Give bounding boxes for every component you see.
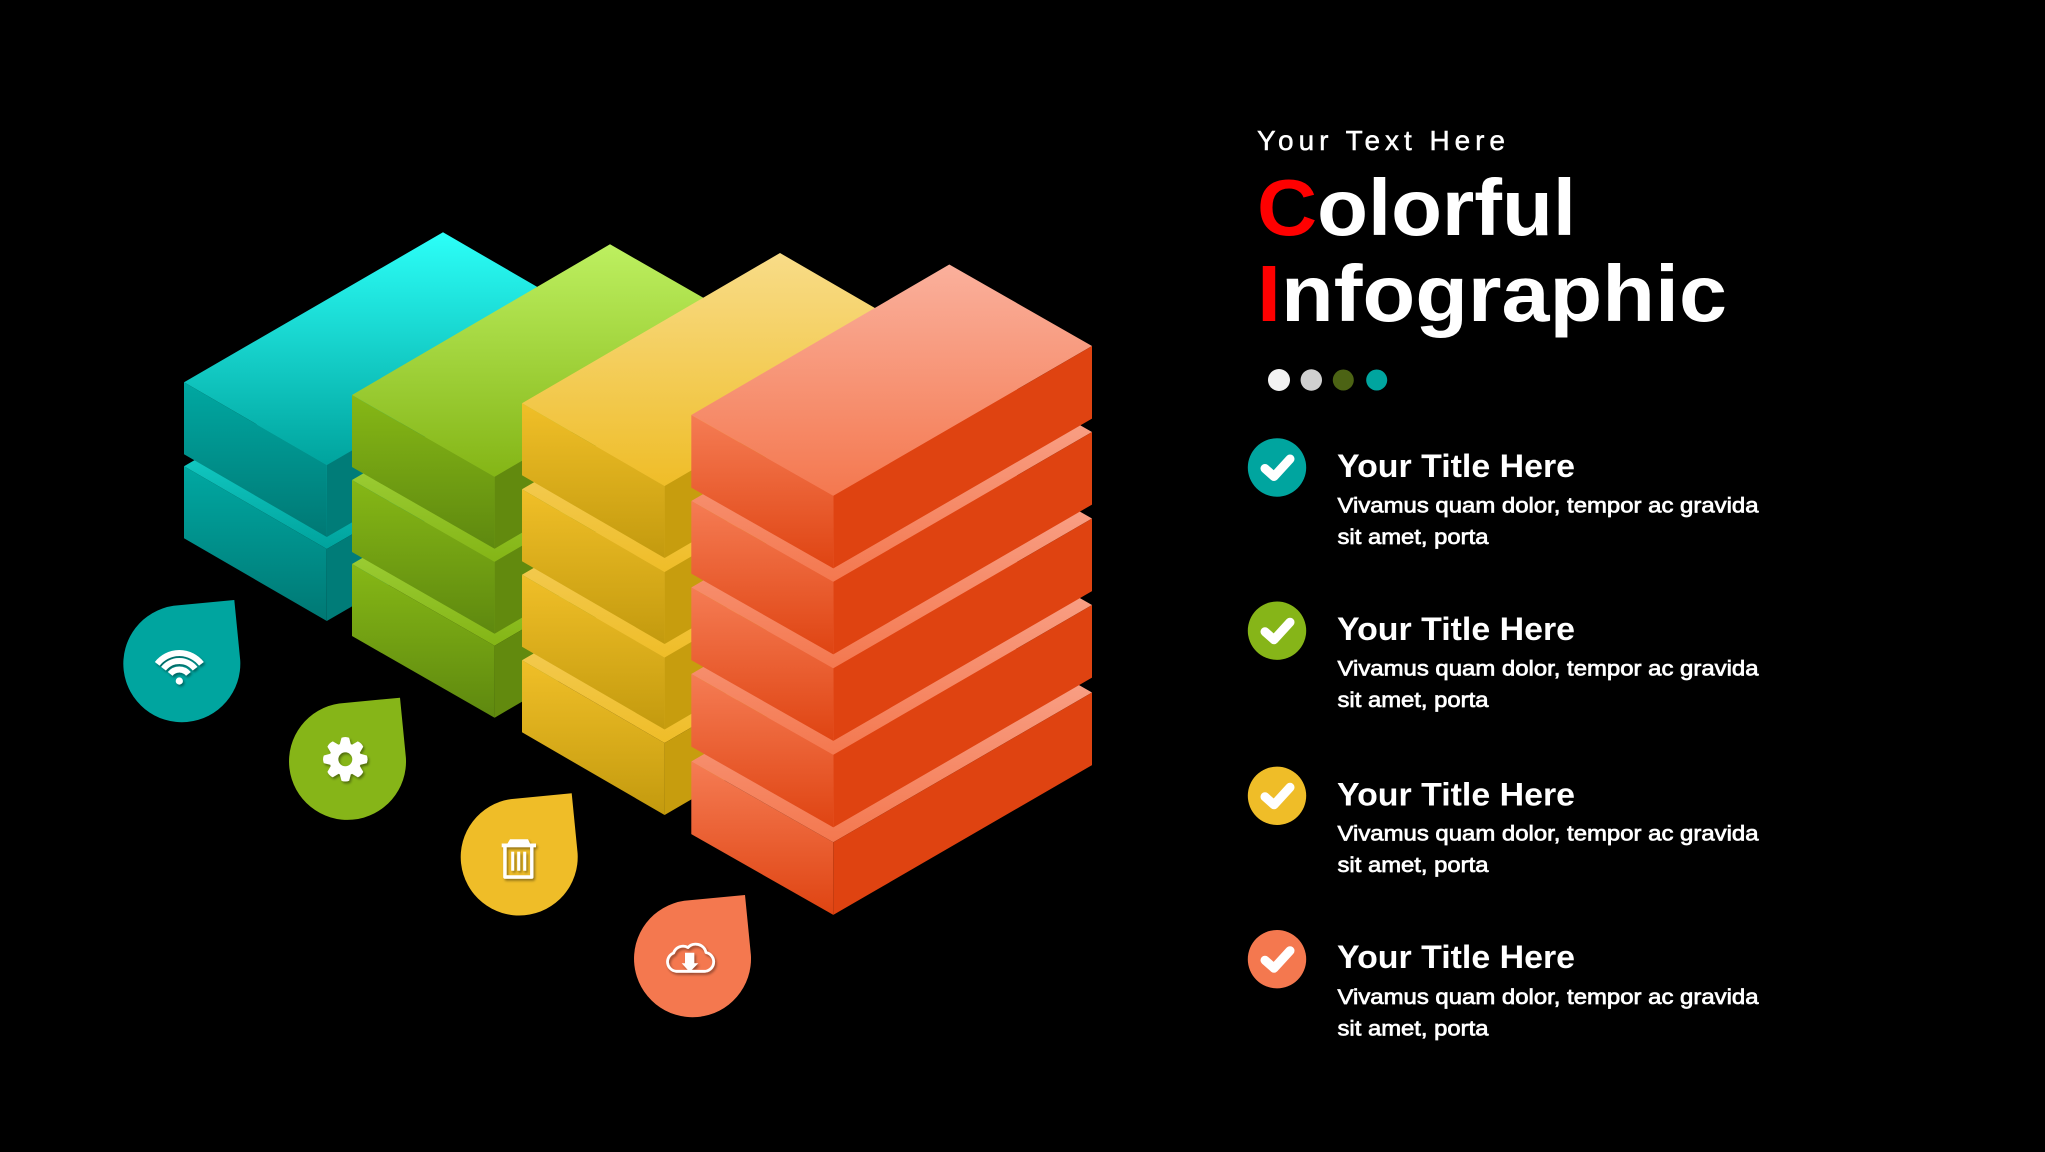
yellow block stack <box>522 253 923 815</box>
teal drop with wifi icon <box>123 600 240 722</box>
icon: wifi <box>157 653 201 685</box>
icon: trash can <box>502 839 536 877</box>
item title: Your Title Here <box>1337 939 1575 975</box>
item body <box>1338 986 1759 1040</box>
icon: cloud download <box>668 944 714 972</box>
list item 3 <box>1248 767 1759 877</box>
eyebrow text: Your Text Here <box>1257 125 1505 156</box>
item title: Your Title Here <box>1337 776 1575 812</box>
item body: Vivamus quam dolor, tempor ac gravida <box>1338 494 1759 518</box>
list item 1 <box>1248 438 1759 549</box>
item title: Your Title Here <box>1337 448 1575 484</box>
teal block stack <box>184 232 586 621</box>
item body: sit amet, porta <box>1338 689 1489 712</box>
item body: sit amet, porta <box>1338 1017 1489 1040</box>
decorative colour dots <box>1268 369 1387 391</box>
item body <box>1338 823 1759 877</box>
green block stack <box>352 244 753 718</box>
icon: green check <box>1248 602 1306 660</box>
title <box>1257 163 1727 338</box>
orange drop with cloud download icon <box>634 895 751 1017</box>
item body: sit amet, porta <box>1338 854 1489 877</box>
title line 1: Colorful <box>1257 163 1576 252</box>
item body: Vivamus quam dolor, tempor ac gravida <box>1338 986 1759 1009</box>
list item 2 <box>1248 602 1759 712</box>
item title: Your Title Here <box>1337 611 1575 647</box>
item body: Vivamus quam dolor, tempor ac gravida <box>1338 658 1759 680</box>
icon: teal check <box>1248 438 1306 497</box>
list item 4 <box>1248 930 1759 1040</box>
green drop with gear icon <box>289 698 406 820</box>
item body: sit amet, porta <box>1338 526 1489 549</box>
orange block stack <box>691 264 1092 915</box>
item body: Vivamus quam dolor, tempor ac gravida <box>1338 823 1759 846</box>
title line 2: Infographic <box>1257 249 1727 338</box>
item body <box>1338 658 1759 712</box>
item body <box>1338 494 1759 549</box>
yellow drop with trash icon <box>461 793 578 916</box>
icon: yellow check <box>1248 767 1306 825</box>
icon: orange check <box>1248 930 1306 988</box>
icon: gear <box>323 737 368 782</box>
